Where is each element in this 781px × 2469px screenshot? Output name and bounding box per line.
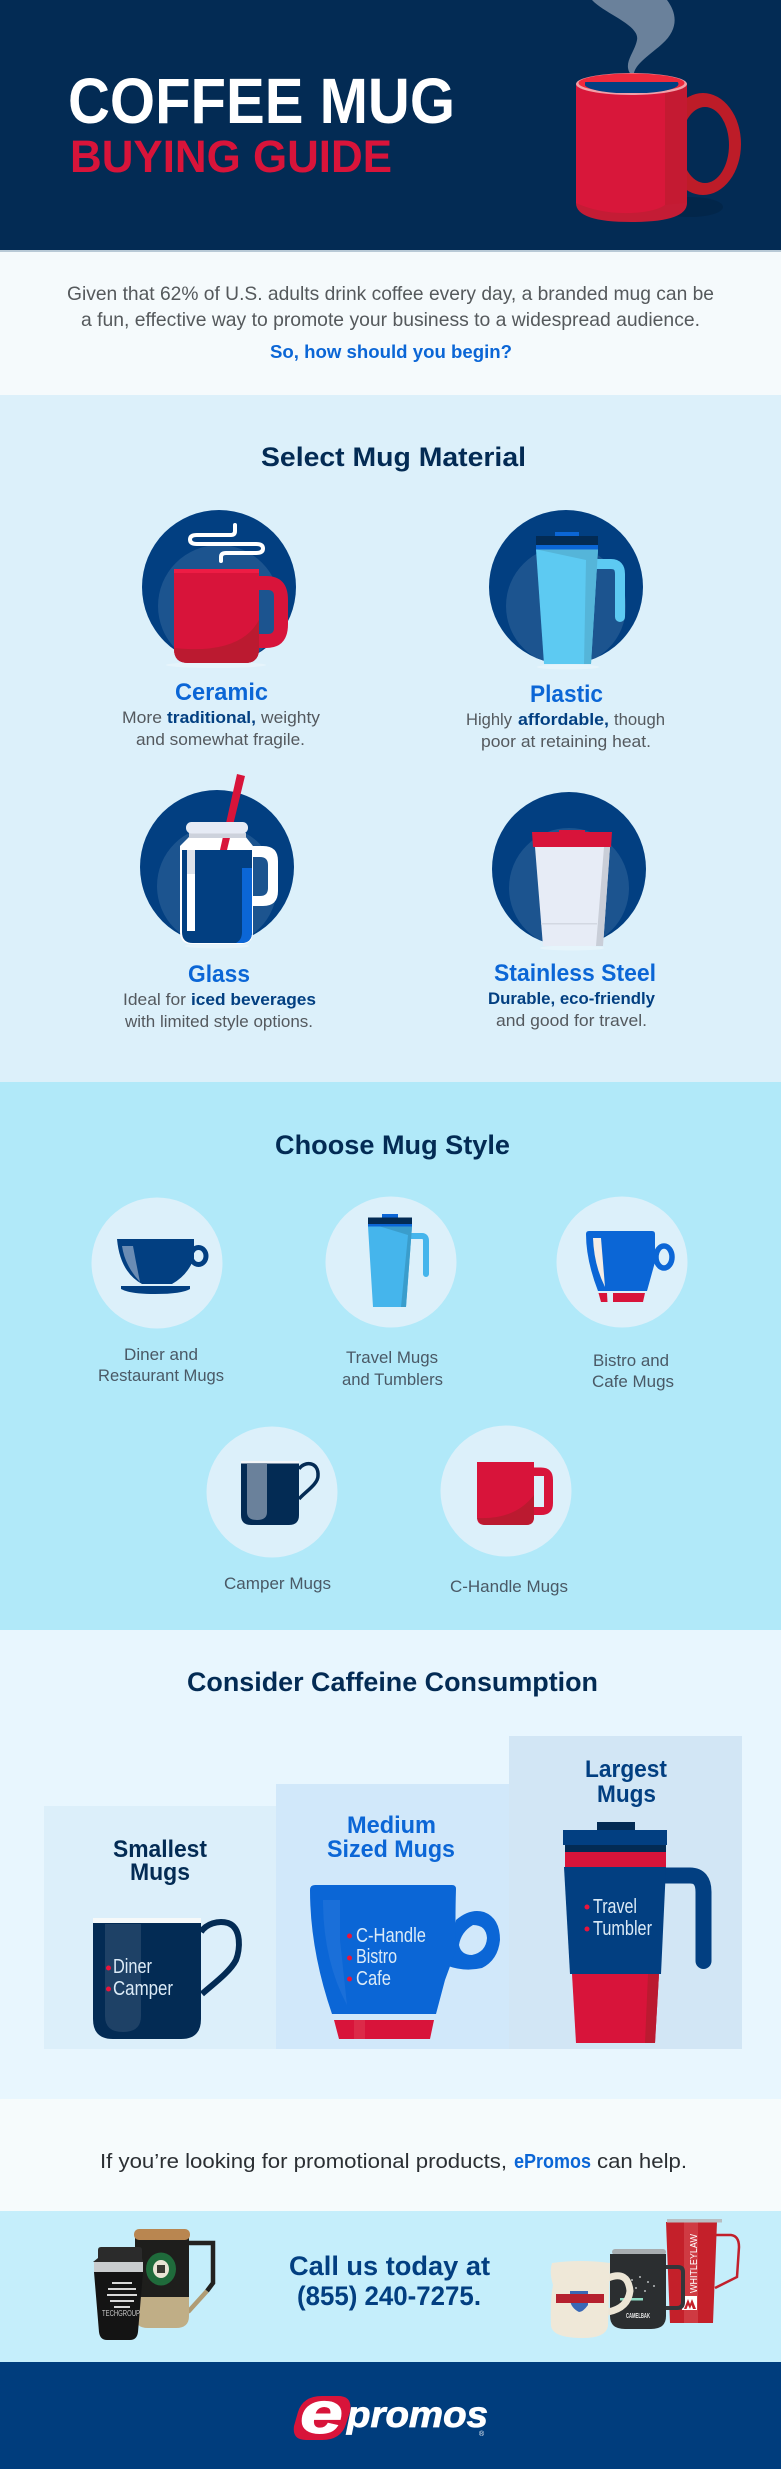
bar: medium sized mugs — [276, 1784, 509, 2049]
text: plastic — [466, 681, 665, 751]
bar: smallest mugs: Smallest — [113, 1836, 207, 1863]
text: promotional line: If you’re looking for promotional products, — [100, 2150, 507, 2173]
icon: steaming red mug — [576, 0, 741, 222]
text: stainless steel — [488, 960, 656, 1030]
text: ceramic: More — [122, 708, 162, 727]
label: camper mugs: Camper Mugs — [224, 1574, 331, 1593]
label: travel mugs: Travel Mugs — [346, 1348, 438, 1367]
icon: ceramic mug — [142, 510, 296, 668]
label: c-handle mugs: C-Handle Mugs — [450, 1577, 568, 1596]
bar: largest mugs — [509, 1736, 742, 2049]
text: glass: with limited style options. — [124, 1012, 313, 1031]
heading: Consider Caffeine Consumption — [187, 1667, 598, 1697]
call to action text: (855) 240-7275. — [297, 2281, 481, 2311]
text: plastic: affordable, — [518, 710, 609, 729]
icon: travel mug — [326, 1196, 456, 1328]
icon: medium mug: Bistro — [356, 1946, 397, 1968]
text: ceramic — [122, 679, 321, 749]
panel: choose mug style — [0, 1082, 781, 1630]
logo: ePromos: promos — [346, 2394, 488, 2435]
heading: Choose Mug Style — [275, 1130, 510, 1160]
intro text — [67, 283, 714, 331]
call to action text — [289, 2251, 490, 2311]
label: bistro mugs: Bistro and — [593, 1351, 669, 1370]
text: stainless steel: Durable, eco-friendly — [488, 989, 656, 1008]
icon: medium mug: C-Handle — [356, 1925, 426, 1947]
text: ceramic: traditional, — [167, 708, 256, 727]
logo: ePromos: ® — [479, 2430, 485, 2438]
text: glass: iced beverages — [191, 990, 316, 1009]
product photo: left mugs — [93, 2229, 213, 2340]
label: diner mugs: Diner and — [124, 1345, 198, 1364]
panel: introduction — [0, 252, 781, 395]
text: ceramic: and somewhat fragile. — [136, 730, 305, 749]
icon: medium mug — [310, 1885, 500, 2039]
text: promotional line — [100, 2150, 687, 2173]
label: diner mugs: Restaurant Mugs — [98, 1366, 224, 1385]
title: COFFEE MUG — [68, 65, 455, 137]
text: glass — [123, 961, 316, 1031]
bar: largest mugs: Largest — [585, 1756, 667, 1783]
text: plastic: Highly — [466, 710, 512, 729]
panel: header — [0, 0, 781, 250]
icon: large travel tumbler: Tumbler — [593, 1918, 652, 1940]
text: promotional line: can help. — [597, 2150, 687, 2173]
product photo: right mugs: CAMELBAK — [626, 2313, 650, 2320]
text: promotional line: ePromos — [514, 2150, 591, 2173]
panel: select mug material — [0, 395, 781, 1082]
bar: medium sized mugs: Medium — [347, 1812, 436, 1839]
panel: call to action — [0, 2211, 781, 2362]
text: plastic: though — [614, 710, 665, 729]
text: plastic: Plastic — [530, 681, 603, 708]
panel: consider caffeine consumption — [0, 1630, 781, 2099]
icon: stainless steel tumbler — [492, 792, 646, 950]
icon: small mug — [93, 1918, 239, 2039]
bar: medium sized mugs: Sized Mugs — [327, 1836, 455, 1863]
title: BUYING GUIDE — [70, 131, 392, 182]
icon: glass mason mug — [140, 774, 294, 948]
icon: large travel tumbler — [563, 1822, 704, 2043]
icon: medium mug: Cafe — [356, 1968, 391, 1990]
panel: footer — [0, 2362, 781, 2469]
text: stainless steel: Stainless Steel — [494, 960, 656, 987]
panel: promotional line — [0, 2099, 781, 2211]
call to action text: Call us today at — [289, 2251, 490, 2281]
icon: camper mug — [206, 1426, 338, 1558]
icon: diner mug — [92, 1198, 222, 1328]
icon: large travel tumbler: Travel — [593, 1896, 637, 1918]
text: glass: Glass — [188, 961, 250, 988]
text: ceramic: weighty — [260, 708, 321, 727]
intro text: a fun, effective way to promote your business to a widespread audience. — [81, 309, 700, 331]
callout question: So, how should you begin? — [270, 342, 512, 362]
label: diner mugs — [98, 1345, 224, 1385]
bar: largest mugs: Mugs — [597, 1781, 656, 1808]
heading: Select Mug Material — [261, 442, 526, 472]
label: travel mugs: and Tumblers — [342, 1370, 443, 1389]
label: travel mugs — [342, 1348, 443, 1389]
product photo: left mugs: TECHGROUP — [102, 2309, 140, 2318]
icon: small mug: Camper — [113, 1978, 173, 2000]
icon: c-handle mug — [440, 1426, 572, 1556]
bar: smallest mugs: Mugs — [130, 1859, 190, 1886]
label: bistro mugs — [592, 1351, 674, 1391]
text: plastic: poor at retaining heat. — [481, 732, 651, 751]
label: bistro mugs: Cafe Mugs — [592, 1372, 674, 1391]
icon: bistro mug — [556, 1196, 688, 1328]
logo: ePromos: e — [300, 2381, 343, 2446]
text: stainless steel: and good for travel. — [496, 1011, 647, 1030]
text: ceramic: Ceramic — [175, 679, 268, 706]
text: glass: Ideal for — [123, 990, 186, 1009]
icon: small mug: Diner — [113, 1956, 152, 1978]
icon: plastic mug — [489, 510, 643, 670]
title — [68, 65, 455, 182]
bar: smallest mugs — [44, 1806, 276, 2049]
product photo: right mugs — [551, 2219, 739, 2338]
product photo: right mugs: WHITLEYLAW — [689, 2233, 700, 2293]
intro text: Given that 62% of U.S. adults drink coffee every day, a branded mug can be — [67, 283, 714, 305]
logo: ePromos — [294, 2381, 488, 2446]
